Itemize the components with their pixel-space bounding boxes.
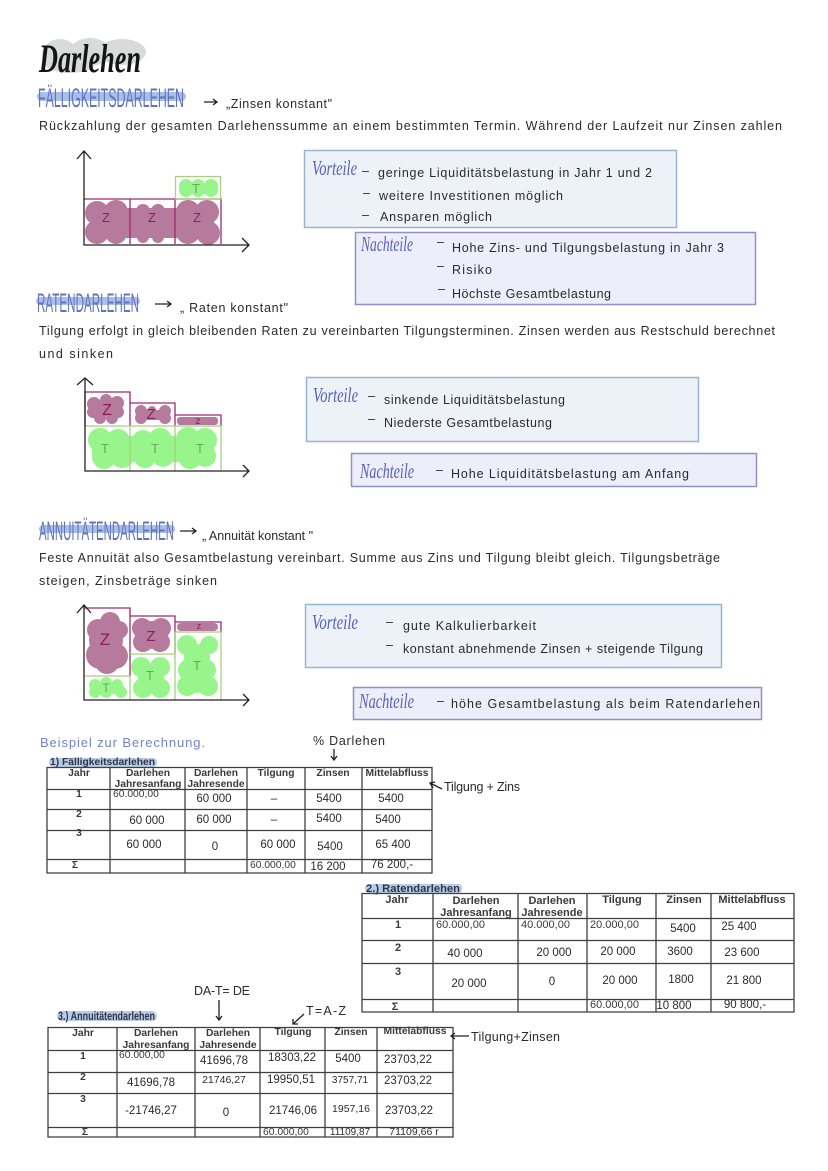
chart: Annuitätendarlehen: Z — [100, 630, 110, 649]
table: Ratendarlehen: 3 — [395, 966, 401, 978]
table: Ratendarlehen: Darlehen — [528, 895, 576, 907]
text: description Ratendarlehen — [39, 324, 776, 361]
table: Fälligkeitsdarlehen: 5400 — [378, 793, 404, 805]
table: Ratendarlehen: 5400 — [670, 923, 696, 935]
table: Annuitätendarlehen: -21746,27 — [125, 1105, 177, 1117]
table: Ratendarlehen: 20 000 — [602, 975, 638, 987]
annotation: Prozent Darlehen — [313, 734, 385, 760]
arrow and note: Annuität konstant: „ Annuität konstant " — [202, 529, 313, 543]
panel: Nachteile Fälligkeitsdarlehen: Höchste Gesamtbelastung — [452, 287, 611, 301]
chart: Annuitätendarlehen: T — [146, 668, 154, 683]
chart: Ratendarlehen: T — [151, 441, 159, 456]
chart: Ratendarlehen: Z — [102, 402, 112, 419]
panel: Nachteile Annuitätendarlehen: Nachteile — [358, 689, 414, 713]
panel: Nachteile Ratendarlehen: Nachteile — [359, 459, 414, 483]
table: Annuitätendarlehen: 18303,22 — [268, 1052, 316, 1064]
chart: Annuitätendarlehen — [77, 605, 249, 706]
chart: Annuitätendarlehen: T — [193, 658, 201, 673]
table: Ratendarlehen: 1800 — [668, 974, 694, 986]
table: Ratendarlehen: 2 — [395, 942, 401, 954]
panel: Nachteile Fälligkeitsdarlehen: Risiko — [452, 263, 492, 277]
chart: Annuitätendarlehen: Z — [146, 628, 156, 645]
chart: Ratendarlehen: z — [196, 416, 200, 427]
table: Ratendarlehen: Jahresanfang — [440, 907, 512, 919]
table: Annuitätendarlehen: Darlehen — [134, 1028, 178, 1039]
panel: Vorteile Fälligkeitsdarlehen: – — [362, 164, 369, 178]
panel: Nachteile Ratendarlehen — [352, 454, 756, 486]
panel: Nachteile Fälligkeitsdarlehen — [356, 232, 756, 304]
table: Fälligkeitsdarlehen: Darlehen — [126, 768, 170, 779]
panel: Vorteile Annuitätendarlehen: gute Kalkulierbarkeit — [403, 619, 537, 633]
panel: Nachteile Ratendarlehen: – — [436, 463, 443, 477]
annotation: T=A-Z — [293, 1004, 346, 1024]
table: Annuitätendarlehen: Jahresanfang — [123, 1040, 189, 1051]
table: Ratendarlehen: 40.000,00 — [521, 919, 570, 931]
table: Fälligkeitsdarlehen: 5400 — [316, 793, 342, 805]
table: Ratendarlehen: 90 800,- — [724, 999, 766, 1011]
table: Ratendarlehen: 25 400 — [721, 921, 757, 933]
annotation: DA-T=DE: DA-T= DE — [194, 984, 250, 998]
table: Ratendarlehen: 1 — [395, 919, 401, 931]
text: description Fälligkeitsdarlehen: Rückzahlung der gesamten Darlehenssumme an einem bestimmten Termin. Während der Laufzeit nur Zinsen zahlen — [39, 119, 782, 133]
annotation: Prozent Darlehen: % Darlehen — [313, 734, 385, 748]
text: description Annuitätendarlehen — [39, 551, 720, 588]
panel: Vorteile Annuitätendarlehen: – — [386, 615, 393, 629]
annotation: DA-T=DE — [194, 984, 250, 1020]
table: Ratendarlehen: 2.) Ratendarlehen — [366, 883, 460, 895]
table: Ratendarlehen: Jahr — [385, 894, 409, 906]
table: Ratendarlehen: 60.000,00 — [436, 919, 485, 931]
panel: Vorteile Annuitätendarlehen: Vorteile — [312, 610, 358, 634]
table: Ratendarlehen: 0 — [549, 976, 555, 988]
annotation: Tilgung + Zinsen: Tilgung+Zinsen — [471, 1030, 560, 1044]
panel: Nachteile Annuitätendarlehen: höhe Gesamtbelastung als beim Ratendarlehen — [451, 697, 760, 711]
panel: Vorteile Fälligkeitsdarlehen: Ansparen möglich — [380, 210, 492, 224]
panel: Vorteile Ratendarlehen: Niederste Gesamtbelastung — [384, 416, 552, 430]
table: Annuitätendarlehen: 60.000,00 — [119, 1050, 165, 1061]
table: Fälligkeitsdarlehen: 60 000 — [260, 839, 296, 851]
panel: Vorteile Fälligkeitsdarlehen — [304, 150, 676, 228]
table: Annuitätendarlehen: Σ — [82, 1127, 88, 1138]
title: Darlehen — [38, 36, 141, 81]
text: description Ratendarlehen: und sinken — [39, 347, 113, 361]
table: Fälligkeitsdarlehen: 60 000 — [196, 793, 232, 805]
panel: Nachteile Fälligkeitsdarlehen: Hohe Zins- und Tilgungsbelastung in Jahr 3 — [452, 241, 724, 255]
table: Ratendarlehen: Darlehen — [452, 895, 500, 907]
table: Fälligkeitsdarlehen: 5400 — [316, 813, 342, 825]
table: Annuitätendarlehen: 11109,87 — [330, 1127, 371, 1138]
panel: Vorteile Annuitätendarlehen — [306, 604, 722, 668]
table: Annuitätendarlehen: 60.000,00 — [263, 1127, 309, 1138]
table: Annuitätendarlehen: Mittelabfluss — [384, 1026, 447, 1037]
heading: Ratendarlehen — [36, 288, 140, 318]
arrow and note: Zinsen konstant: „Zinsen konstant" — [226, 97, 332, 111]
table: Ratendarlehen: 10 800 — [656, 1000, 692, 1012]
table: Fälligkeitsdarlehen: Jahr — [68, 768, 90, 779]
chart: Fälligkeitsdarlehen: Z — [102, 210, 110, 225]
table: Annuitätendarlehen: 0 — [223, 1107, 229, 1119]
panel: Vorteile Ratendarlehen — [306, 378, 698, 442]
table: Annuitätendarlehen: 1 — [80, 1051, 86, 1062]
heading: Annuitätendarlehen — [39, 516, 175, 546]
table: Annuitätendarlehen: 23703,22 — [384, 1075, 432, 1087]
text: description Annuitätendarlehen: steigen, Zinsbeträge sinken — [39, 574, 217, 588]
table: Ratendarlehen: 21 800 — [726, 975, 762, 987]
table: Annuitätendarlehen: 1957,16 — [332, 1103, 370, 1115]
table: Annuitätendarlehen: 23703,22 — [385, 1105, 433, 1117]
table: Fälligkeitsdarlehen: 60.000,00 — [113, 789, 159, 800]
table: Ratendarlehen: Zinsen — [666, 894, 702, 906]
chart: Fälligkeitsdarlehen — [77, 151, 249, 252]
table: Ratendarlehen: 20.000,00 — [590, 919, 639, 931]
table: Fälligkeitsdarlehen: Zinsen — [316, 768, 350, 779]
panel: Vorteile Ratendarlehen: Vorteile — [313, 383, 358, 407]
table: Fälligkeitsdarlehen: Jahresende — [187, 779, 245, 790]
chart: Ratendarlehen — [77, 378, 249, 477]
table: Fälligkeitsdarlehen: 65 400 — [375, 839, 411, 851]
table: Ratendarlehen: 20 000 — [600, 946, 636, 958]
arrow and note: Raten konstant: „ Raten konstant" — [180, 301, 288, 315]
table: Fälligkeitsdarlehen: 1 — [76, 789, 82, 800]
chart: Annuitätendarlehen: T — [102, 681, 110, 695]
chart: Ratendarlehen: T — [196, 441, 204, 456]
table: Ratendarlehen: 40 000 — [447, 948, 483, 960]
table: Annuitätendarlehen: 2 — [80, 1072, 86, 1083]
table: Fälligkeitsdarlehen: 3 — [76, 828, 82, 839]
panel: Vorteile Fälligkeitsdarlehen: weitere Investitionen möglich — [378, 189, 563, 203]
table: Annuitätendarlehen: 5400 — [335, 1053, 361, 1065]
table: Fälligkeitsdarlehen: Mittelabfluss — [366, 768, 429, 779]
panel: Nachteile Annuitätendarlehen — [354, 688, 762, 720]
heading: Beispiel zur Berechnung: Beispiel zur Berechnung. — [40, 735, 205, 750]
table: Annuitätendarlehen: 19950,51 — [267, 1074, 315, 1086]
chart: Fälligkeitsdarlehen: T — [192, 181, 200, 196]
panel: Vorteile Fälligkeitsdarlehen: geringe Liquiditätsbelastung in Jahr 1 und 2 — [378, 166, 652, 180]
table: Annuitätendarlehen: 3.) Annuitätendarlehen — [58, 1011, 155, 1023]
table: Fälligkeitsdarlehen: 2 — [76, 809, 82, 820]
chart: Annuitätendarlehen: z — [197, 621, 202, 631]
table: Annuitätendarlehen: Jahr — [72, 1028, 94, 1039]
table: Fälligkeitsdarlehen: 5400 — [317, 841, 343, 853]
table: Annuitätendarlehen: 23703,22 — [384, 1054, 432, 1066]
panel: Vorteile Ratendarlehen: – — [368, 412, 375, 426]
panel: Vorteile Annuitätendarlehen: konstant abnehmende Zinsen + steigende Tilgung — [403, 642, 703, 656]
annotation: Tilgung + Zins: Tilgung + Zins — [444, 780, 520, 794]
table: Annuitätendarlehen: 41696,78 — [200, 1055, 248, 1067]
text: ANNUITÄTENDARLEHEN — [39, 516, 174, 546]
table: Fälligkeitsdarlehen — [47, 756, 432, 873]
table: Fälligkeitsdarlehen: – — [271, 814, 278, 826]
chart: Fälligkeitsdarlehen: Z — [148, 210, 156, 225]
table: Annuitätendarlehen: 3 — [80, 1094, 86, 1105]
table: Ratendarlehen — [362, 883, 794, 1013]
table: Fälligkeitsdarlehen: 60 000 — [126, 839, 162, 851]
table: Ratendarlehen: 20 000 — [451, 978, 487, 990]
panel: Nachteile Fälligkeitsdarlehen: – — [437, 235, 444, 249]
table: Ratendarlehen: 3600 — [667, 946, 693, 958]
table: Annuitätendarlehen: 71109,66 r — [389, 1126, 439, 1138]
panel: Vorteile Ratendarlehen: sinkende Liquiditätsbelastung — [384, 393, 565, 407]
panel: Nachteile Fälligkeitsdarlehen: – — [437, 259, 444, 273]
table: Annuitätendarlehen: Darlehen — [206, 1028, 250, 1039]
text: FÄLLIGKEITSDARLEHEN — [38, 83, 184, 113]
panel: Vorteile Fälligkeitsdarlehen: – — [363, 186, 370, 200]
chart: Ratendarlehen: Z — [146, 406, 156, 423]
table: Ratendarlehen: Σ — [392, 1001, 399, 1013]
text: description Ratendarlehen: Tilgung erfolgt in gleich bleibenden Raten zu vereinbarten Tilgungsterminen. Zinsen werden aus Restschuld berechnet — [39, 324, 776, 338]
table: Fälligkeitsdarlehen: Tilgung — [258, 768, 294, 779]
table: Fälligkeitsdarlehen: 1) Fälligkeitsdarlehen — [50, 756, 155, 768]
annotation: T=A-Z: T=A-Z — [306, 1004, 346, 1018]
table: Fälligkeitsdarlehen: 0 — [212, 841, 218, 853]
table: Fälligkeitsdarlehen: – — [271, 793, 278, 805]
table: Fälligkeitsdarlehen: Darlehen — [194, 768, 238, 779]
panel: Nachteile Annuitätendarlehen: – — [437, 694, 444, 708]
heading: Fälligkeitsdarlehen — [37, 83, 186, 113]
table: Annuitätendarlehen: 21746,27 — [202, 1074, 246, 1086]
table: Fälligkeitsdarlehen: 76 200,- — [371, 859, 413, 871]
table: Annuitätendarlehen: 41696,78 — [127, 1077, 175, 1089]
table: Ratendarlehen: 23 600 — [724, 947, 760, 959]
text: description Annuitätendarlehen: Feste Annuität also Gesamtbelastung vereinbart. Summe aus Zins und Tilgung bleibt gleich. Tilgungsbeträge — [39, 551, 720, 565]
table: Ratendarlehen: Tilgung — [602, 894, 642, 906]
table: Annuitätendarlehen: 3757,71 — [332, 1075, 369, 1086]
table: Ratendarlehen: Jahresende — [521, 907, 583, 919]
table: Annuitätendarlehen — [48, 1011, 453, 1138]
table: Fälligkeitsdarlehen: Jahresanfang — [115, 779, 181, 790]
table: Fälligkeitsdarlehen: 60 000 — [196, 814, 232, 826]
table: Ratendarlehen: 60.000,00 — [590, 999, 639, 1011]
table: Fälligkeitsdarlehen: Σ — [72, 860, 78, 871]
table: Fälligkeitsdarlehen: 60 000 — [129, 815, 165, 827]
panel: Vorteile Fälligkeitsdarlehen: Vorteile — [312, 156, 357, 180]
title — [38, 36, 146, 81]
table: Ratendarlehen: Mittelabfluss — [718, 894, 786, 906]
table: Ratendarlehen: 20 000 — [536, 947, 572, 959]
table: Annuitätendarlehen: Jahresende — [199, 1040, 257, 1051]
panel: Vorteile Annuitätendarlehen: – — [386, 638, 393, 652]
panel: Nachteile Ratendarlehen: Hohe Liquiditätsbelastung am Anfang — [451, 467, 689, 481]
table: Annuitätendarlehen: Tilgung — [275, 1027, 311, 1038]
panel: Vorteile Fälligkeitsdarlehen: – — [362, 208, 369, 222]
table: Fälligkeitsdarlehen: 60.000,00 — [250, 860, 296, 871]
table: Fälligkeitsdarlehen: 16 200 — [310, 861, 346, 873]
chart: Fälligkeitsdarlehen: Z — [193, 210, 201, 225]
chart: Ratendarlehen: T — [101, 441, 109, 456]
panel: Nachteile Fälligkeitsdarlehen: – — [438, 282, 445, 296]
panel: Vorteile Ratendarlehen: – — [368, 389, 375, 403]
table: Annuitätendarlehen: 21746,06 — [269, 1105, 317, 1117]
panel: Nachteile Fälligkeitsdarlehen: Nachteile — [360, 232, 413, 256]
table: Fälligkeitsdarlehen: 5400 — [375, 814, 401, 826]
text: RATENDARLEHEN — [37, 288, 139, 318]
table: Annuitätendarlehen: Zinsen — [334, 1027, 368, 1038]
